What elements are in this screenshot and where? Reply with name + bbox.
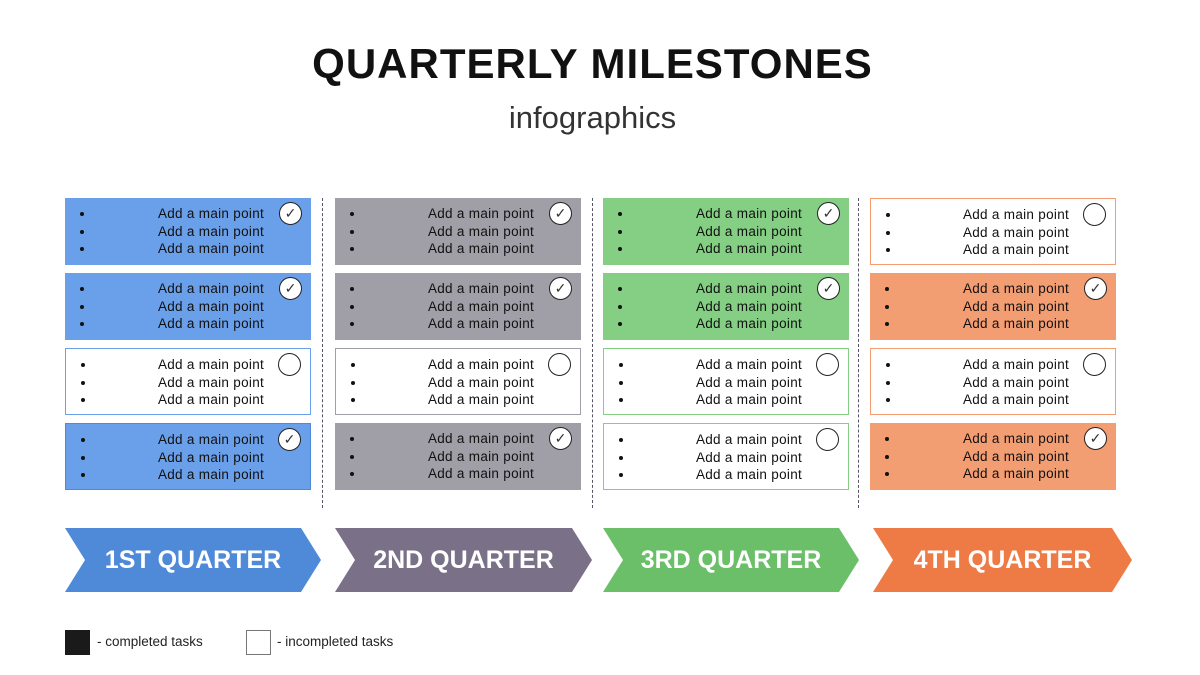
arrow: 3rd quarter: 3RD QUARTER [641,546,821,574]
panel: Q2 row2 [335,273,581,340]
panel: Q4 row2 [870,273,1116,340]
panel: Q4 row3 [870,348,1116,415]
panel: Q1 row1 [65,198,311,265]
subtitle: infographics [509,100,676,135]
arrow: 4th quarter [873,528,1132,592]
panel: Q3 row2: Add a main point [696,281,802,296]
arrow: 3rd quarter [603,528,859,592]
panel: Q3 row1 [603,198,849,265]
panel: Q2 row4: Add a main point [428,448,534,464]
panel: Q2 row3 [335,348,581,415]
panel: Q2 row4: ✓ [555,430,566,446]
panel: Q1 row1: Add a main point [158,206,264,221]
panel: Q3 row1: ✓ [823,205,834,221]
panel: Q3 row2: Add a main point [696,298,802,314]
panel: Q2 row3: Add a main point [428,374,534,390]
panel: Q1 row3: Add a main point [158,357,264,372]
panel: Q2 row4: Add a main point [428,431,534,446]
panel: Q1 row3: Add a main point [158,392,264,407]
panel: Q3 row2 [603,273,849,340]
panel: Q4 row2: Add a main point [963,316,1069,331]
panel: Q1 row4: ✓ [284,431,295,447]
panel: Q1 row2: Add a main point [158,281,264,296]
panel: Q4 row4 [870,423,1116,490]
arrow: 2nd quarter: 2ND QUARTER [373,546,554,574]
panel: Q1 row3 [65,348,311,415]
panel: Q1 row2: Add a main point [158,298,264,314]
legend: completed: - completed tasks [97,634,203,649]
panel: Q4 row4: ✓ [1090,430,1101,446]
panel: Q3 row1: Add a main point [696,224,802,238]
panel: Q2 row1: Add a main point [428,224,534,238]
panel: Q2 row1 [335,198,581,265]
arrow: 2nd quarter [335,528,592,592]
panel: Q1 row1: ✓ [285,205,296,221]
panel: Q4 row2: Add a main point [963,298,1069,314]
panel: Q1 row2 [65,273,311,340]
panel: Q4 row1: Add a main point [963,207,1069,222]
legend: incompleted [246,630,393,655]
panel: Q3 row1: Add a main point [696,206,802,221]
panel: Q3 row4: Add a main point [696,432,802,447]
panel: Q1 row4: Add a main point [158,467,264,482]
panel: Q4 row2: ✓ [1090,280,1101,296]
panel: Q2 row2: Add a main point [428,316,534,331]
panel: Q4 row4: Add a main point [963,431,1069,446]
panel: Q3 row2: Add a main point [696,316,802,331]
panel: Q1 row2: Add a main point [158,316,264,331]
panel: Q3 row4: Add a main point [696,467,802,482]
panel: Q2 row4 [335,423,581,490]
panel: Q1 row4: Add a main point [158,432,264,447]
panel: Q3 row3: Add a main point [696,357,802,372]
panel: Q2 row1: Add a main point [428,206,534,221]
panel: Q3 row2: ✓ [823,280,834,296]
panel: Q2 row3: Add a main point [428,392,534,407]
panel: Q4 row1 [870,198,1116,265]
panel: Q3 row3: Add a main point [696,392,802,407]
panel: Q1 row2: ✓ [285,280,296,296]
panel: Q4 row1: Add a main point [963,224,1069,240]
title: QUARTERLY MILESTONES [312,40,873,87]
panel: Q1 row3: Add a main point [158,374,264,390]
panel: Q3 row4 [603,423,849,490]
panel: Q3 row1: Add a main point [696,241,802,256]
panel: Q2 row3: Add a main point [428,357,534,372]
panel: Q4 row3: Add a main point [963,392,1069,407]
arrow: 1st quarter: 1ST QUARTER [105,546,281,574]
panel: Q2 row2: Add a main point [428,298,534,314]
panel: Q2 row1: ✓ [555,205,566,221]
arrow: 1st quarter [65,528,321,592]
panel: Q3 row3: Add a main point [696,374,802,390]
panel: Q4 row2: Add a main point [963,281,1069,296]
panel: Q3 row3 [603,348,849,415]
panel: Q4 row4: Add a main point [963,466,1069,481]
panel: Q4 row3: Add a main point [963,357,1069,372]
panel: Q2 row2: ✓ [555,280,566,296]
panel: Q4 row1: Add a main point [963,242,1069,257]
panel: Q2 row1: Add a main point [428,241,534,256]
arrow: 4th quarter: 4TH QUARTER [914,546,1091,574]
panel: Q1 row4: Add a main point [158,450,264,464]
panel: Q1 row1: Add a main point [158,241,264,256]
panel: Q1 row1: Add a main point [158,224,264,238]
panel: Q2 row4: Add a main point [428,466,534,481]
panel: Q4 row3: Add a main point [963,374,1069,390]
panel: Q3 row4: Add a main point [696,450,802,464]
panel: Q1 row4 [65,423,311,490]
panel: Q4 row4: Add a main point [963,448,1069,464]
panel: Q2 row2: Add a main point [428,281,534,296]
legend: incompleted: - incompleted tasks [277,634,393,649]
legend: completed [65,630,203,655]
